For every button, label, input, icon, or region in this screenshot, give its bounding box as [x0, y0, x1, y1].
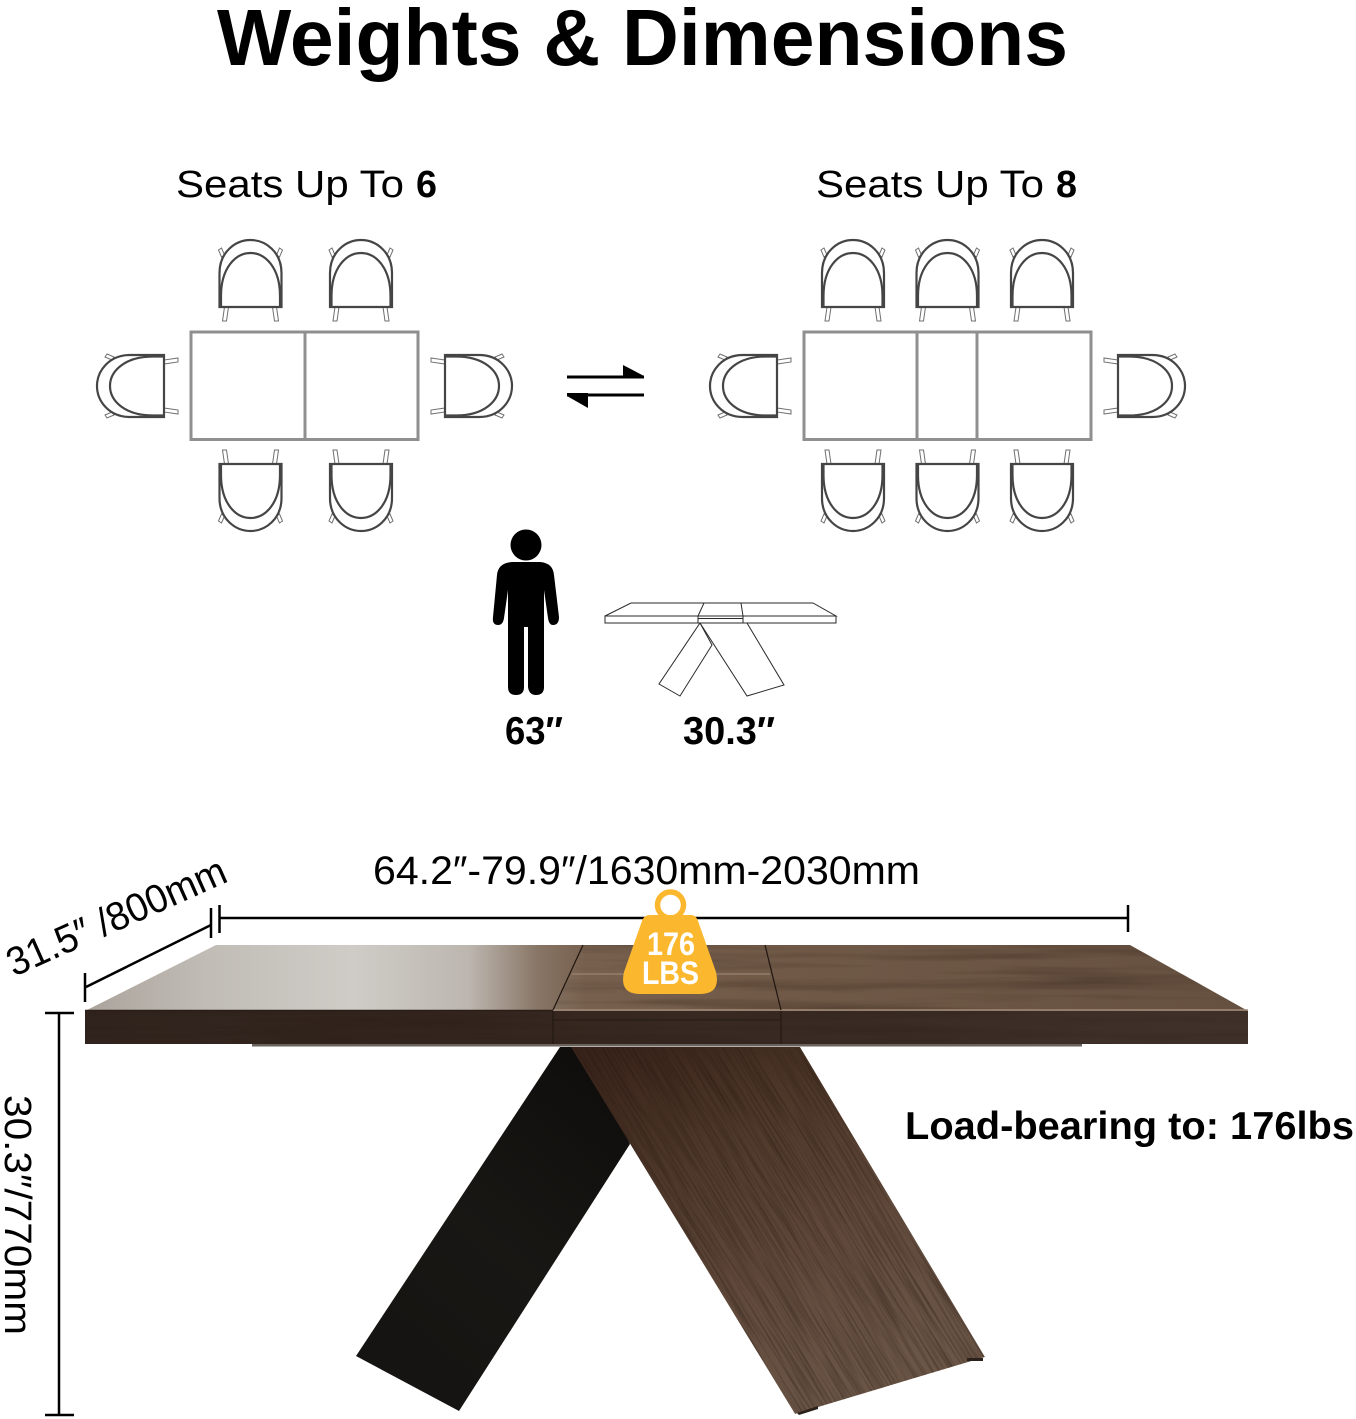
- heading: seats up to 6: 6: [416, 164, 437, 206]
- heading: seats up to 8: Seats Up To: [816, 164, 1044, 206]
- label: length dimension: 64.2″-79.9″/1630mm-2030mm: [373, 849, 920, 893]
- chair: left end: [97, 354, 178, 418]
- wood grain on front edge: [85, 1011, 1248, 1044]
- wood grain on top surface: [553, 945, 1253, 1011]
- seating plan: 6 seats: [97, 240, 512, 531]
- table outline: extended with centre leaf: [804, 332, 1091, 440]
- icon: 176 lbs weight badge: LBS: [642, 955, 699, 991]
- table leg: black: [356, 1047, 630, 1411]
- table leg: walnut: [571, 1047, 1027, 1414]
- chair: bottom left: [218, 450, 282, 531]
- heading: seats up to 6: Seats Up To: [176, 164, 404, 206]
- callout: load-bearing capacity: Load-bearing to: 176lbs: [905, 1105, 1354, 1148]
- under-rail: [252, 1043, 1082, 1046]
- chair: right end: [1104, 354, 1185, 418]
- chair: right end: [431, 354, 512, 418]
- heading: seats up to 8: 8: [1056, 164, 1077, 206]
- chair: bottom 3: [1010, 450, 1074, 531]
- chair: bottom 1: [821, 450, 885, 531]
- dimension line: length: [220, 905, 1128, 933]
- icon: person silhouette: [493, 530, 559, 695]
- dimension line: height: [45, 1013, 74, 1415]
- table top surface: [85, 945, 1248, 1011]
- label: width dimension: 31.5″ /800mm: [0, 849, 233, 985]
- chair: top left: [218, 240, 282, 321]
- chair: top 3: [1010, 240, 1074, 321]
- icon: 176 lbs weight badge: 176: [647, 926, 695, 962]
- seating plan: 8 seats: [710, 240, 1185, 531]
- chair: top right: [329, 240, 393, 321]
- label: person height: 63″: [505, 710, 563, 753]
- chair: top 1: [821, 240, 885, 321]
- icon: table line drawing: [605, 603, 836, 696]
- icon: conversion arrows: [567, 365, 644, 408]
- chair: bottom 2: [916, 450, 980, 531]
- label: table height: 30.3″: [683, 710, 775, 753]
- chair: left end: [710, 354, 791, 418]
- leg feet: [797, 1358, 983, 1415]
- front edge: [85, 1011, 1248, 1044]
- icon: 176 lbs weight badge: [623, 892, 717, 994]
- table photo: [85, 945, 1253, 1415]
- chair: top 2: [916, 240, 980, 321]
- chair: bottom right: [329, 450, 393, 531]
- table outline: two leaves: [191, 332, 418, 440]
- dimension line: width: [85, 908, 211, 1002]
- front-edge highlights and leaf seams: [85, 945, 1248, 1044]
